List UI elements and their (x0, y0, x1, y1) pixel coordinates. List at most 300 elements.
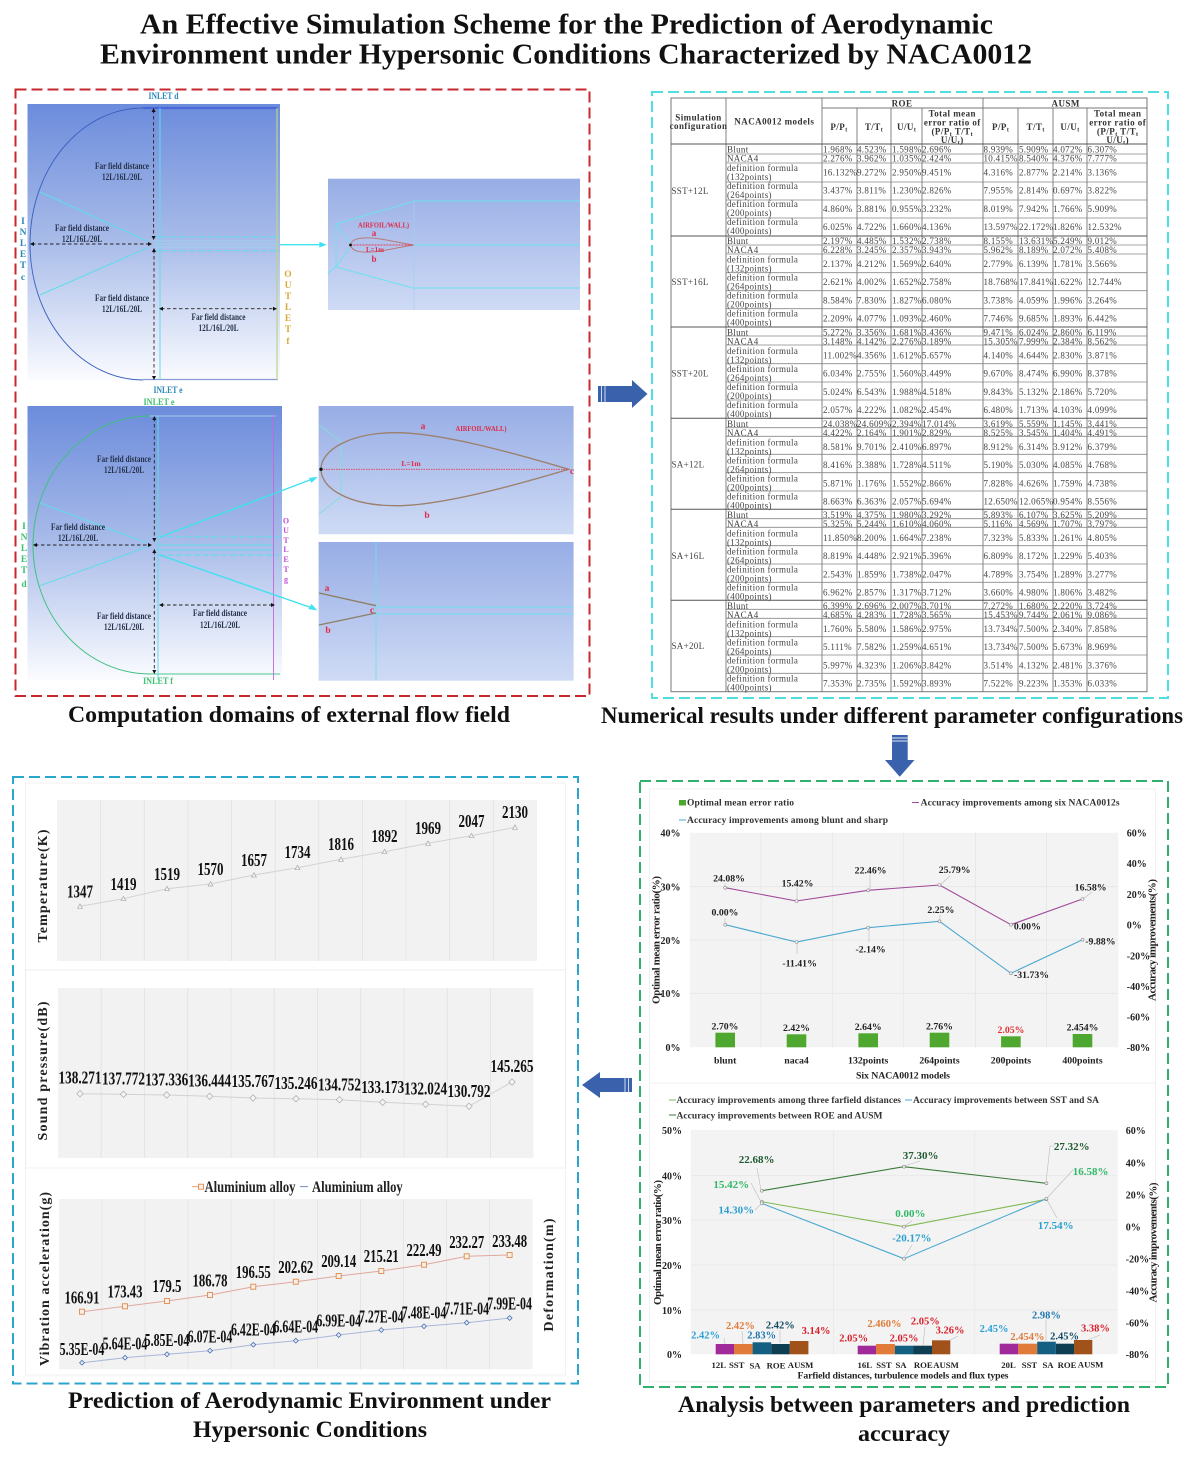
table rows: SST+16L: (200points) (727, 300, 772, 310)
table rows: SA+16L: 4.375% (857, 510, 887, 520)
table rows: SST+12L: 22.172% (1019, 222, 1054, 232)
line labels: 37.30% (903, 1150, 938, 1162)
category labels: SST (1022, 1360, 1037, 1370)
bar labels: 2.05% (839, 1333, 868, 1344)
table rows: SST+20L: 4.222% (857, 405, 887, 415)
table rows: SA+20L: definition formula (727, 656, 798, 666)
line labels: -2.14% (855, 944, 886, 955)
right axis ticks: 60% (1127, 829, 1147, 840)
table rows: SA+12L: 4.491% (1088, 428, 1117, 438)
table rows: SA+16L: SA+16L (672, 551, 704, 561)
table rows: SA+20L: definition formula (727, 620, 798, 630)
table rows: SA+12L: 2.394% (892, 419, 922, 429)
vibration value labels: 232.27 (449, 1232, 484, 1252)
table header: Simulation (675, 112, 722, 122)
table rows: SST+16L: definition formula (727, 254, 798, 264)
table rows: SA+12L: definition formula (727, 473, 798, 483)
line labels: 16.58% (1075, 882, 1107, 893)
table rows: SA+12L: 5.559% (1019, 419, 1049, 429)
vibration value labels: 222.49 (406, 1240, 442, 1260)
bar labels: 2.98% (1032, 1310, 1061, 1321)
table rows: SA+20L: 5.673% (1053, 642, 1083, 652)
table rows: SA+20L: 6.033% (1088, 679, 1117, 689)
table rows: SA+20L: 2.696% (857, 601, 887, 611)
table rows: SA+16L: 3.712% (922, 588, 952, 598)
chart legend: aluminium alloy (192, 1179, 403, 1196)
table rows: SA+16L: 5.833% (1019, 533, 1049, 543)
table header: t (1115, 132, 1118, 138)
table rows: SST+12L: NACA4 (727, 154, 759, 164)
left axis ticks: 50% (662, 1126, 682, 1137)
panel: analysis between parameters and accuracy (640, 781, 1168, 1387)
table rows: SA+20L: 2.975% (922, 624, 952, 634)
table rows: SST+16L: 1.569% (892, 259, 922, 269)
bar labels: 2.460% (867, 1319, 901, 1330)
table rows: SA+20L: 7.522% (984, 679, 1013, 689)
right axis ticks: 60% (1126, 1126, 1146, 1137)
table rows: SST+16L: 1.996% (1053, 296, 1083, 306)
category labels: SA (895, 1360, 907, 1370)
domain diagram: top C-grid: T (285, 325, 292, 335)
bar labels: 2.05% (911, 1317, 940, 1328)
table rows: SA+16L: 4.805% (1088, 533, 1117, 543)
table rows: SA+16L: definition formula (727, 582, 798, 592)
bar labels: 2.42% (766, 1320, 795, 1331)
table rows: SST+20L: 2.276% (892, 336, 922, 346)
table rows: SST+20L: 2.860% (1053, 328, 1083, 338)
table rows: SA+16L: 1.261% (1053, 533, 1083, 543)
table rows: SA+16L: 1.289% (1053, 570, 1083, 580)
table rows: SST+12L: (200points) (727, 208, 772, 218)
table rows: SA+12L: 2.057% (892, 496, 922, 506)
category labels: AUSM (933, 1360, 959, 1370)
table rows: SST+16L: 1.893% (1053, 314, 1083, 324)
table rows: SST+12L: 1.598% (892, 144, 922, 154)
table rows: SST+16L: 17.841% (1019, 277, 1054, 287)
bar labels: 3.26% (936, 1326, 964, 1337)
table rows: SST+12L: 4.316% (984, 168, 1013, 178)
table rows: SA+12L: 2.866% (922, 478, 952, 488)
table rows: SST+12L: 9.451% (922, 168, 952, 178)
table header: T/T (1118, 127, 1136, 137)
detail: small airfoil: AIRFOIL/WALL) (358, 220, 409, 230)
chart: farfield, turbulence and flux: Accuracy improvements(%) (1148, 1182, 1160, 1302)
table rows: SA+20L: 1.728% (892, 610, 922, 620)
category labels: SST (729, 1360, 745, 1370)
line: SST and SA (762, 1199, 1046, 1259)
table rows: SST+12L: 3.822% (1088, 186, 1117, 196)
table rows: SST+20L: (264points) (727, 373, 772, 383)
category labels: 20L (1001, 1360, 1016, 1370)
table rows: SST+12L: 10.415% (984, 154, 1018, 164)
bar labels: 2.42% (726, 1321, 755, 1332)
domain diagram: lower C-grid: U (283, 526, 289, 535)
table rows: SA+12L: 5.030% (1019, 460, 1049, 470)
table header (670, 99, 1147, 146)
category labels: 12L (712, 1360, 726, 1370)
table rows: SST+20L: 3.871% (1088, 350, 1117, 360)
table header: t (845, 128, 848, 134)
table grid (671, 98, 1147, 692)
table rows: SST+20L: 6.543% (857, 387, 887, 397)
table rows: SA+20L: NACA4 (727, 610, 759, 620)
table rows: SA+20L: 13.734% (984, 642, 1018, 652)
table rows: SA+16L: 1.317% (892, 588, 922, 598)
arrow: right block arrow (598, 380, 648, 408)
title: An Effective Simulation Scheme for the Prediction of Aerodynamic (140, 10, 993, 40)
domain diagram: top C-grid: E (285, 314, 291, 324)
table rows: SST+12L: 4.523% (857, 144, 887, 154)
table header: t (1077, 128, 1080, 134)
bars: 12L group (716, 1341, 808, 1354)
bar labels: 2.454% (1067, 1023, 1098, 1034)
bar labels: 2.45% (980, 1324, 1008, 1335)
table rows: SA+16L: 3.625% (1053, 510, 1083, 520)
table rows: SST+20L: definition formula (727, 364, 798, 374)
chart legend: six models: Accuracy improvements among blunt and sharp (687, 816, 888, 826)
table rows: SA+16L: definition formula (727, 564, 798, 574)
table rows: SA+16L: (132points) (727, 538, 772, 548)
line labels: 14.30% (718, 1204, 754, 1216)
chart: temperature: Temperature(K) (36, 829, 51, 942)
line labels (712, 865, 1116, 981)
right axis ticks (1127, 829, 1150, 1054)
temperature value labels: 2130 (502, 802, 528, 822)
bar labels: 2.42% (783, 1023, 810, 1034)
table rows: SA+20L: 4.132% (1019, 661, 1049, 671)
table rows: SST+12L: 3.232% (922, 204, 952, 214)
table rows: SST+12L: definition formula (727, 217, 798, 227)
table rows: SST+12L: definition formula (727, 199, 798, 209)
table rows: SST+20L: 4.518% (922, 387, 952, 397)
domain diagram: top C-grid: f (286, 337, 290, 347)
table rows: SST+16L: 13.631% (1019, 236, 1054, 246)
chart legend: farfield: Accuracy improvements between ROE and AUSM (676, 1112, 883, 1122)
table rows: SA+16L: Blunt (727, 510, 749, 520)
deformation value labels: 6.99E-04 (316, 1311, 361, 1331)
chart: six NACA0012 models: Six NACA0012 models (856, 1071, 950, 1082)
table rows: SST+16L: 1.532% (892, 236, 922, 246)
domain diagram: top C-grid: c (21, 273, 25, 283)
domain diagram: lower C-grid: 12L/16L/20L (104, 465, 144, 475)
sound pressure value labels (58, 1056, 534, 1101)
table rows: SA+12L: 6.363% (857, 496, 887, 506)
table rows: SST+12L: 5.909% (1019, 144, 1049, 154)
bar labels: 2.45% (1050, 1332, 1079, 1343)
detail: trailing edge: c (370, 606, 374, 616)
detail: small airfoil: L=1m (366, 246, 384, 254)
vibration value labels: 179.5 (152, 1276, 182, 1296)
table rows: SA+20L: definition formula (727, 674, 798, 684)
table header: t (1136, 132, 1139, 138)
table rows: SA+16L: 2.047% (922, 570, 952, 580)
category labels: ROE (914, 1360, 933, 1370)
category labels: AUSM (1078, 1360, 1103, 1370)
table rows: SST+12L: 16.132% (823, 168, 858, 178)
table rows: SST+20L: (400points) (727, 409, 772, 419)
table rows: SA+12L: 2.829% (922, 428, 952, 438)
table rows: SST+12L: 7.777% (1088, 154, 1117, 164)
table rows: SA+12L: 8.416% (823, 460, 853, 470)
table rows: SA+12L: (400points) (727, 500, 772, 510)
left axis ticks: 10% (662, 1306, 682, 1317)
table rows: SA+12L: 4.511% (922, 460, 951, 470)
table rows: SA+12L: definition formula (727, 437, 798, 447)
title (100, 10, 1032, 70)
caption: prediction: Prediction of Aerodynamic Environment under (68, 1388, 551, 1413)
table rows: SST+12L: 4.136% (922, 222, 952, 232)
table rows: SA+12L: definition formula (727, 455, 798, 465)
table rows: SA+20L: 3.842% (922, 661, 952, 671)
table header: U/U (1106, 135, 1123, 145)
chart: farfield, turbulence and flux: Optimal mean error ratio(%) (652, 1180, 664, 1305)
table rows: SST+12L: 1.230% (892, 186, 922, 196)
category labels: blunt (714, 1055, 737, 1066)
chart legend: six models: Optimal mean error ratio (687, 798, 794, 808)
domain diagram: top C-grid: 12L/16L/20L (102, 304, 142, 314)
table header: T/T (1027, 122, 1042, 132)
table rows: SST+16L: 2.640% (922, 259, 952, 269)
vibration value labels: 233.48 (492, 1231, 527, 1251)
vibration value labels (64, 1231, 527, 1308)
table rows: SA+16L: 7.238% (922, 533, 952, 543)
domain diagram: lower C-grid: O (283, 516, 289, 526)
domain diagram: top C-grid: 12L/16L/20L (102, 172, 142, 182)
vibration value labels: 166.91 (64, 1288, 100, 1308)
table header: t (914, 128, 916, 134)
deformation value labels: 6.64E-04 (273, 1317, 318, 1337)
table rows: SST+20L: 2.384% (1053, 336, 1083, 346)
domain diagram: top C-grid: T (285, 292, 292, 302)
domain diagram: top C-grid (20, 91, 292, 395)
line labels: 22.68% (739, 1154, 774, 1166)
table rows: SA+16L: 1.859% (857, 570, 887, 580)
table rows: SA+20L: definition formula (727, 638, 798, 648)
table rows: SST+16L: 5.408% (1088, 245, 1117, 255)
table rows: SA+12L: 4.422% (823, 428, 853, 438)
caption: prediction: Hypersonic Conditions (193, 1417, 427, 1442)
bars: 20L group (1000, 1340, 1092, 1354)
bar labels: 2.05% (890, 1334, 918, 1345)
table rows: SST+20L: 2.830% (1053, 350, 1083, 360)
table rows: SST+12L: 2.814% (1019, 186, 1049, 196)
category labels: naca4 (784, 1055, 809, 1066)
table rows: SA+20L: 7.272% (984, 601, 1013, 611)
detail: trailing edge (319, 542, 574, 681)
arrows: zoom to leading and trailing edge (160, 478, 316, 610)
table rows: SA+16L: 7.323% (984, 533, 1013, 543)
domain diagram: top C-grid: T (20, 261, 27, 271)
table rows: SST+12L: 1.968% (823, 144, 853, 154)
table rows: SST+20L: (200points) (727, 391, 772, 401)
detail: large airfoil: AIRFOIL/WALL) (456, 424, 507, 433)
table rows: SA+20L: (400points) (727, 683, 772, 693)
table rows: SA+20L: 1.680% (1019, 601, 1049, 611)
domain diagram: top C-grid: 12L/16L/20L (62, 234, 102, 244)
right axis ticks: -80% (1127, 1043, 1150, 1054)
line labels: 15.42% (782, 878, 813, 889)
table header: t (971, 132, 973, 138)
domain diagram: lower C-grid: T (283, 565, 289, 574)
table rows: SST+16L: 7.830% (857, 296, 887, 306)
table rows: SST+16L: 3.943% (922, 245, 952, 255)
table rows: SST+16L: 5.962% (984, 245, 1013, 255)
table rows: SST+16L: 2.621% (823, 277, 853, 287)
bar labels: 2.83% (747, 1330, 776, 1341)
table rows: SA+16L: (264points) (727, 556, 772, 566)
right axis ticks: -60% (1127, 1013, 1150, 1024)
line labels (713, 1141, 1108, 1244)
temperature value labels: 1969 (415, 818, 441, 838)
left axis ticks: 40% (662, 1172, 682, 1182)
table header: Total mean (1094, 109, 1141, 119)
table rows: SA+16L: 3.277% (1088, 570, 1117, 580)
table rows: SA+20L: 2.340% (1053, 624, 1083, 634)
table rows: SA+12L: 8.912% (984, 442, 1013, 452)
table rows: SST+16L: (132points) (727, 264, 772, 274)
table rows: SST+12L: 2.696% (922, 144, 952, 154)
table rows: SST+12L: 6.025% (823, 222, 853, 232)
table rows: SST+12L: 7.942% (1019, 204, 1049, 214)
table rows: SST+16L: 6.139% (1019, 259, 1049, 269)
table rows: SST+16L: 4.212% (857, 259, 887, 269)
table rows: SST+16L: 1.652% (892, 277, 922, 287)
vibration value labels: 209.14 (321, 1251, 356, 1271)
table rows: SA+20L: 6.399% (823, 601, 853, 611)
table rows: SA+20L: 7.353% (823, 679, 853, 689)
deformation value labels: 7.99E-04 (487, 1294, 532, 1314)
line: ROE and AUSM (762, 1167, 1046, 1191)
table rows: SST+20L: 3.436% (922, 328, 952, 338)
table rows: SST+16L: 6.442% (1088, 314, 1117, 324)
domain diagram: top C-grid: Far field distance (55, 223, 109, 233)
table rows: SST+20L: 8.562% (1088, 336, 1117, 346)
table rows: SST+16L: 2.738% (922, 236, 952, 246)
table rows: SA+20L: 2.061% (1053, 610, 1083, 620)
table rows: SA+20L: 5.997% (823, 661, 853, 671)
table rows: SST+20L: SST+20L (672, 368, 709, 378)
sound pressure value labels: 138.271 (58, 1068, 102, 1088)
table rows: SA+16L: 1.806% (1053, 588, 1083, 598)
table rows: SST+16L: 18.768% (984, 277, 1018, 287)
table rows: SST+12L: 4.376% (1053, 154, 1083, 164)
table rows: SST+16L: 9.685% (1019, 314, 1049, 324)
table header: (P/P (931, 127, 950, 137)
table rows: SST+20L (672, 328, 1117, 419)
arrow: down block arrow (885, 735, 914, 777)
table rows: SA+20L: (200points) (727, 665, 772, 675)
table rows: SST+16L: 9.012% (1088, 236, 1117, 246)
table rows: SA+12L: 3.388% (857, 460, 887, 470)
bar labels (712, 1021, 1098, 1036)
domain diagram: top C-grid: Far field distance (192, 312, 246, 322)
sound pressure value labels: 137.772 (102, 1068, 145, 1088)
table rows: SA+16L: 5.244% (857, 519, 887, 529)
temperature value labels: 1816 (328, 834, 354, 854)
left axis ticks (662, 1126, 682, 1361)
category labels: 400points (1062, 1055, 1103, 1066)
right axis ticks (1126, 1126, 1149, 1361)
table rows: SST+20L: 6.990% (1053, 368, 1083, 378)
domain diagram: lower C-grid: 12L/16L/20L (200, 620, 240, 630)
table rows: SST+12L: 3.811% (857, 186, 886, 196)
table rows: SA+20L: 9.086% (1088, 610, 1117, 620)
table header: ROE (892, 99, 912, 109)
domain diagram: lower C-grid: Far field distance (97, 454, 151, 464)
domain diagram: lower C-grid: Far field distance (97, 611, 151, 621)
table rows: SA+16L: 2.921% (892, 551, 922, 561)
right axis ticks: -80% (1126, 1350, 1149, 1361)
table rows: SA+16L: 8.200% (857, 533, 887, 543)
detail: large airfoil: c (570, 467, 574, 477)
table rows: SST+16L: 12.744% (1088, 277, 1122, 287)
line labels: -20.17% (892, 1232, 932, 1244)
domain diagram: top C-grid: N (20, 228, 27, 238)
domain diagram: lower C-grid: N (21, 533, 28, 543)
caption: numerical results: Numerical results under different parameter configurations (601, 703, 1183, 728)
sound pressure value labels: 135.767 (232, 1071, 274, 1091)
domain diagram: top C-grid: INLET d (148, 91, 178, 101)
caption: analysis: Analysis between parameters and prediction (678, 1392, 1130, 1417)
table rows: SA+20L: 1.592% (892, 679, 922, 689)
table rows: SST+20L: NACA4 (727, 336, 759, 346)
table rows: SA+16L: 1.980% (892, 510, 922, 520)
table rows: SST+12L: definition formula (727, 181, 798, 191)
category labels: SA (1042, 1360, 1054, 1370)
table rows: SST+12L: 1.035% (892, 154, 922, 164)
table rows: SA+12L: 24.609% (857, 419, 892, 429)
table rows: SST+16L: 1.827% (892, 296, 922, 306)
bar labels: 2.76% (926, 1021, 953, 1032)
table rows: SST+20L: 6.480% (984, 405, 1013, 415)
chart legend: farfield: Accuracy improvements among three farfield distances (676, 1096, 901, 1106)
table rows: SST+20L: 2.755% (857, 368, 887, 378)
table rows: SA+16L: 8.172% (1019, 551, 1049, 561)
left axis ticks: 10% (660, 989, 680, 1000)
table rows: SST+16L: 2.758% (922, 277, 952, 287)
deformation value labels (60, 1294, 532, 1359)
table rows: SST+20L: 3.189% (922, 336, 952, 346)
table rows: SA+16L: 4.060% (922, 519, 952, 529)
table rows: SST+20L: 8.474% (1019, 368, 1049, 378)
table rows: SST+12L: (132points) (727, 172, 772, 182)
chart: six NACA0012 models (650, 798, 1158, 1082)
temperature value labels: 1519 (154, 864, 180, 884)
detail: small airfoil (328, 179, 580, 310)
table rows: SA+20L: 1.206% (892, 661, 922, 671)
table rows: SA+12L: NACA4 (727, 428, 759, 438)
chart legend: aluminium alloy: Aluminium alloy (204, 1179, 296, 1196)
table rows: SST+20L: 9.471% (984, 328, 1013, 338)
table rows: SA+16L: 6.962% (823, 588, 853, 598)
bar labels: 2.42% (691, 1331, 720, 1342)
table rows: SA+16L: 4.980% (1019, 588, 1049, 598)
table rows: SA+12L: 4.738% (1088, 478, 1117, 488)
bars (715, 1033, 1092, 1047)
detail: large airfoil (319, 406, 574, 534)
table rows: SA+20L: 15.453% (984, 610, 1018, 620)
table rows: SST+12L: 4.072% (1053, 144, 1083, 154)
table rows: SST+20L: 5.272% (823, 328, 853, 338)
table rows: SST+16L: 1.622% (1053, 277, 1083, 287)
table rows: SA+20L: 1.760% (823, 624, 853, 634)
line labels: -31.73% (1014, 970, 1049, 981)
table rows: SA+12L: (200points) (727, 482, 772, 492)
table rows: SA+16L: 1.707% (1053, 519, 1083, 529)
table rows: SST+12L: 3.136% (1088, 168, 1117, 178)
table rows: SA+20L: 3.514% (984, 661, 1013, 671)
domain diagram: lower C-grid: Far field distance (193, 608, 247, 618)
